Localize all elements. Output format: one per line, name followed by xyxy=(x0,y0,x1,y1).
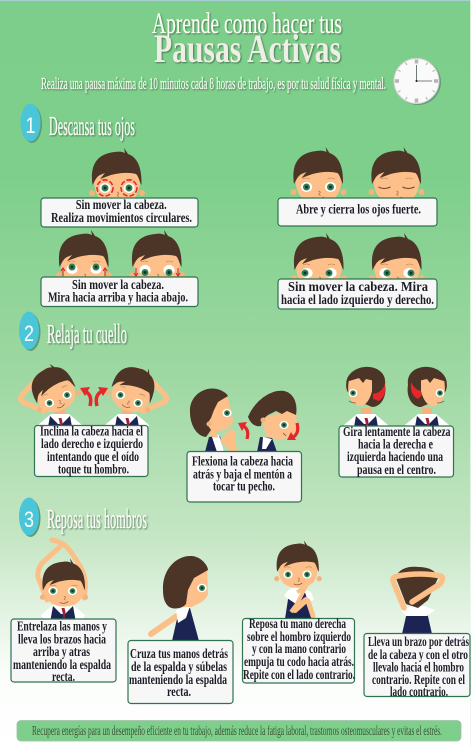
section 2 heading: 2 xyxy=(24,321,34,346)
panel: flex head back and forward: atrás y baja el mentón a xyxy=(193,466,292,482)
panel: circular eye movement xyxy=(41,148,198,227)
panel: circular eye movement: Sin mover la cabeza. xyxy=(76,197,167,212)
panel: interlace hands overhead: lleva los brazos hacia xyxy=(18,632,106,646)
panel: flex head back and forward: tocar tu pecho. xyxy=(213,479,275,494)
character tilting left xyxy=(20,357,85,438)
arrow: right xyxy=(96,387,108,406)
arrow: forward xyxy=(287,423,298,440)
text: Descansa tus ojos xyxy=(49,111,135,141)
panel: hand on opposite shoulder: empuja tu codo hacia atrás. xyxy=(244,654,354,669)
section 3 heading: 3 xyxy=(24,507,34,532)
panel: interlace hands overhead: Entrelaza las manos y xyxy=(17,619,107,634)
panel: turn head side to side xyxy=(339,367,454,477)
panel: cross hands behind back xyxy=(128,556,233,704)
panel: interlace hands overhead xyxy=(11,540,116,684)
section 1 heading: 1 xyxy=(26,113,36,138)
character tilting right xyxy=(102,357,166,438)
icon: clock xyxy=(394,58,441,105)
character turning right xyxy=(405,367,449,438)
text: Relaja tu cuello xyxy=(47,319,127,349)
panel: hand on opposite shoulder: Reposa tu mano derecha xyxy=(249,616,346,631)
panel: eyes up and down: Sin mover la cabeza. xyxy=(72,277,164,292)
panel: hand on opposite shoulder: y con la mano contrario xyxy=(252,641,346,656)
character eyes closed xyxy=(368,147,424,203)
panel: eyes up and down xyxy=(41,230,198,306)
character eyes open xyxy=(290,147,346,203)
panel: eyes up and down: Mira hacia arriba y hacia abajo. xyxy=(48,290,188,305)
panel: tilt head to shoulder: Inclina la cabeza hacia el xyxy=(40,424,143,439)
section 1 heading xyxy=(20,104,135,143)
panel: arm behind head xyxy=(364,567,470,699)
character head xyxy=(89,148,145,204)
panel: hand on opposite shoulder xyxy=(242,540,355,683)
character looking right xyxy=(369,233,425,289)
character side view xyxy=(151,556,208,641)
character head back xyxy=(190,388,237,452)
footer banner xyxy=(17,720,461,741)
character front view xyxy=(274,540,322,619)
section 2 heading xyxy=(19,312,127,351)
panel: hand on opposite shoulder: Repite con el lado contrario. xyxy=(243,667,355,682)
section 3 heading xyxy=(19,498,147,537)
panel: cross hands behind back: manteniendo la espalda xyxy=(129,672,227,687)
title: Pausas Activas xyxy=(154,26,341,71)
panel: circular eye movement: Realiza movimientos circulares. xyxy=(51,210,192,225)
character head forward xyxy=(248,391,297,452)
panel: flex head back and forward: Flexiona la cabeza hacia xyxy=(192,454,293,469)
panel: eyes left and right: Sin mover la cabeza. Mira xyxy=(288,279,428,294)
panel: tilt head to shoulder: intentando que el oído xyxy=(47,449,139,464)
panel: tilt head to shoulder: lado derecho e izquierdo xyxy=(41,436,143,451)
panel: eyes left and right: hacia el lado izquierdo y derecho. xyxy=(281,292,434,307)
panel: open and close eyes: Abre y cierra los ojos fuerte. xyxy=(296,202,421,216)
character looking left xyxy=(291,233,347,289)
panel: cross hands behind back: de la espalda y súbelas xyxy=(131,659,227,674)
panel: open and close eyes xyxy=(278,147,437,226)
title xyxy=(152,7,342,71)
arrow: back xyxy=(238,422,248,439)
character turning left xyxy=(344,367,388,438)
character looking down xyxy=(129,230,185,286)
panel: interlace hands overhead: recta. xyxy=(52,669,75,684)
character arms overhead xyxy=(38,540,88,628)
panel: cross hands behind back: Cruza tus manos detrás xyxy=(130,646,228,661)
text: Reposa tus hombros xyxy=(47,504,147,534)
arrow: left xyxy=(80,387,91,406)
panel: turn head side to side: hacia la derecha e xyxy=(358,436,433,452)
panel: flex head back and forward xyxy=(187,388,302,502)
panel: turn head side to side: pausa en el centro. xyxy=(357,462,436,477)
panel: eyes left and right xyxy=(278,233,437,309)
panel: hand on opposite shoulder: sobre el hombro izquierdo xyxy=(247,629,351,644)
panel: interlace hands overhead: manteniendo la espalda xyxy=(13,657,111,672)
title: Aprende como hacer tus xyxy=(152,7,342,40)
character looking up xyxy=(56,230,112,286)
character back view xyxy=(393,567,442,634)
panel: cross hands behind back: recta. xyxy=(167,684,191,699)
panel: interlace hands overhead: arriba y atras xyxy=(33,644,90,659)
panel: tilt head to shoulder: toque tu hombro. xyxy=(58,462,129,477)
panel: tilt head to shoulder xyxy=(20,357,166,477)
